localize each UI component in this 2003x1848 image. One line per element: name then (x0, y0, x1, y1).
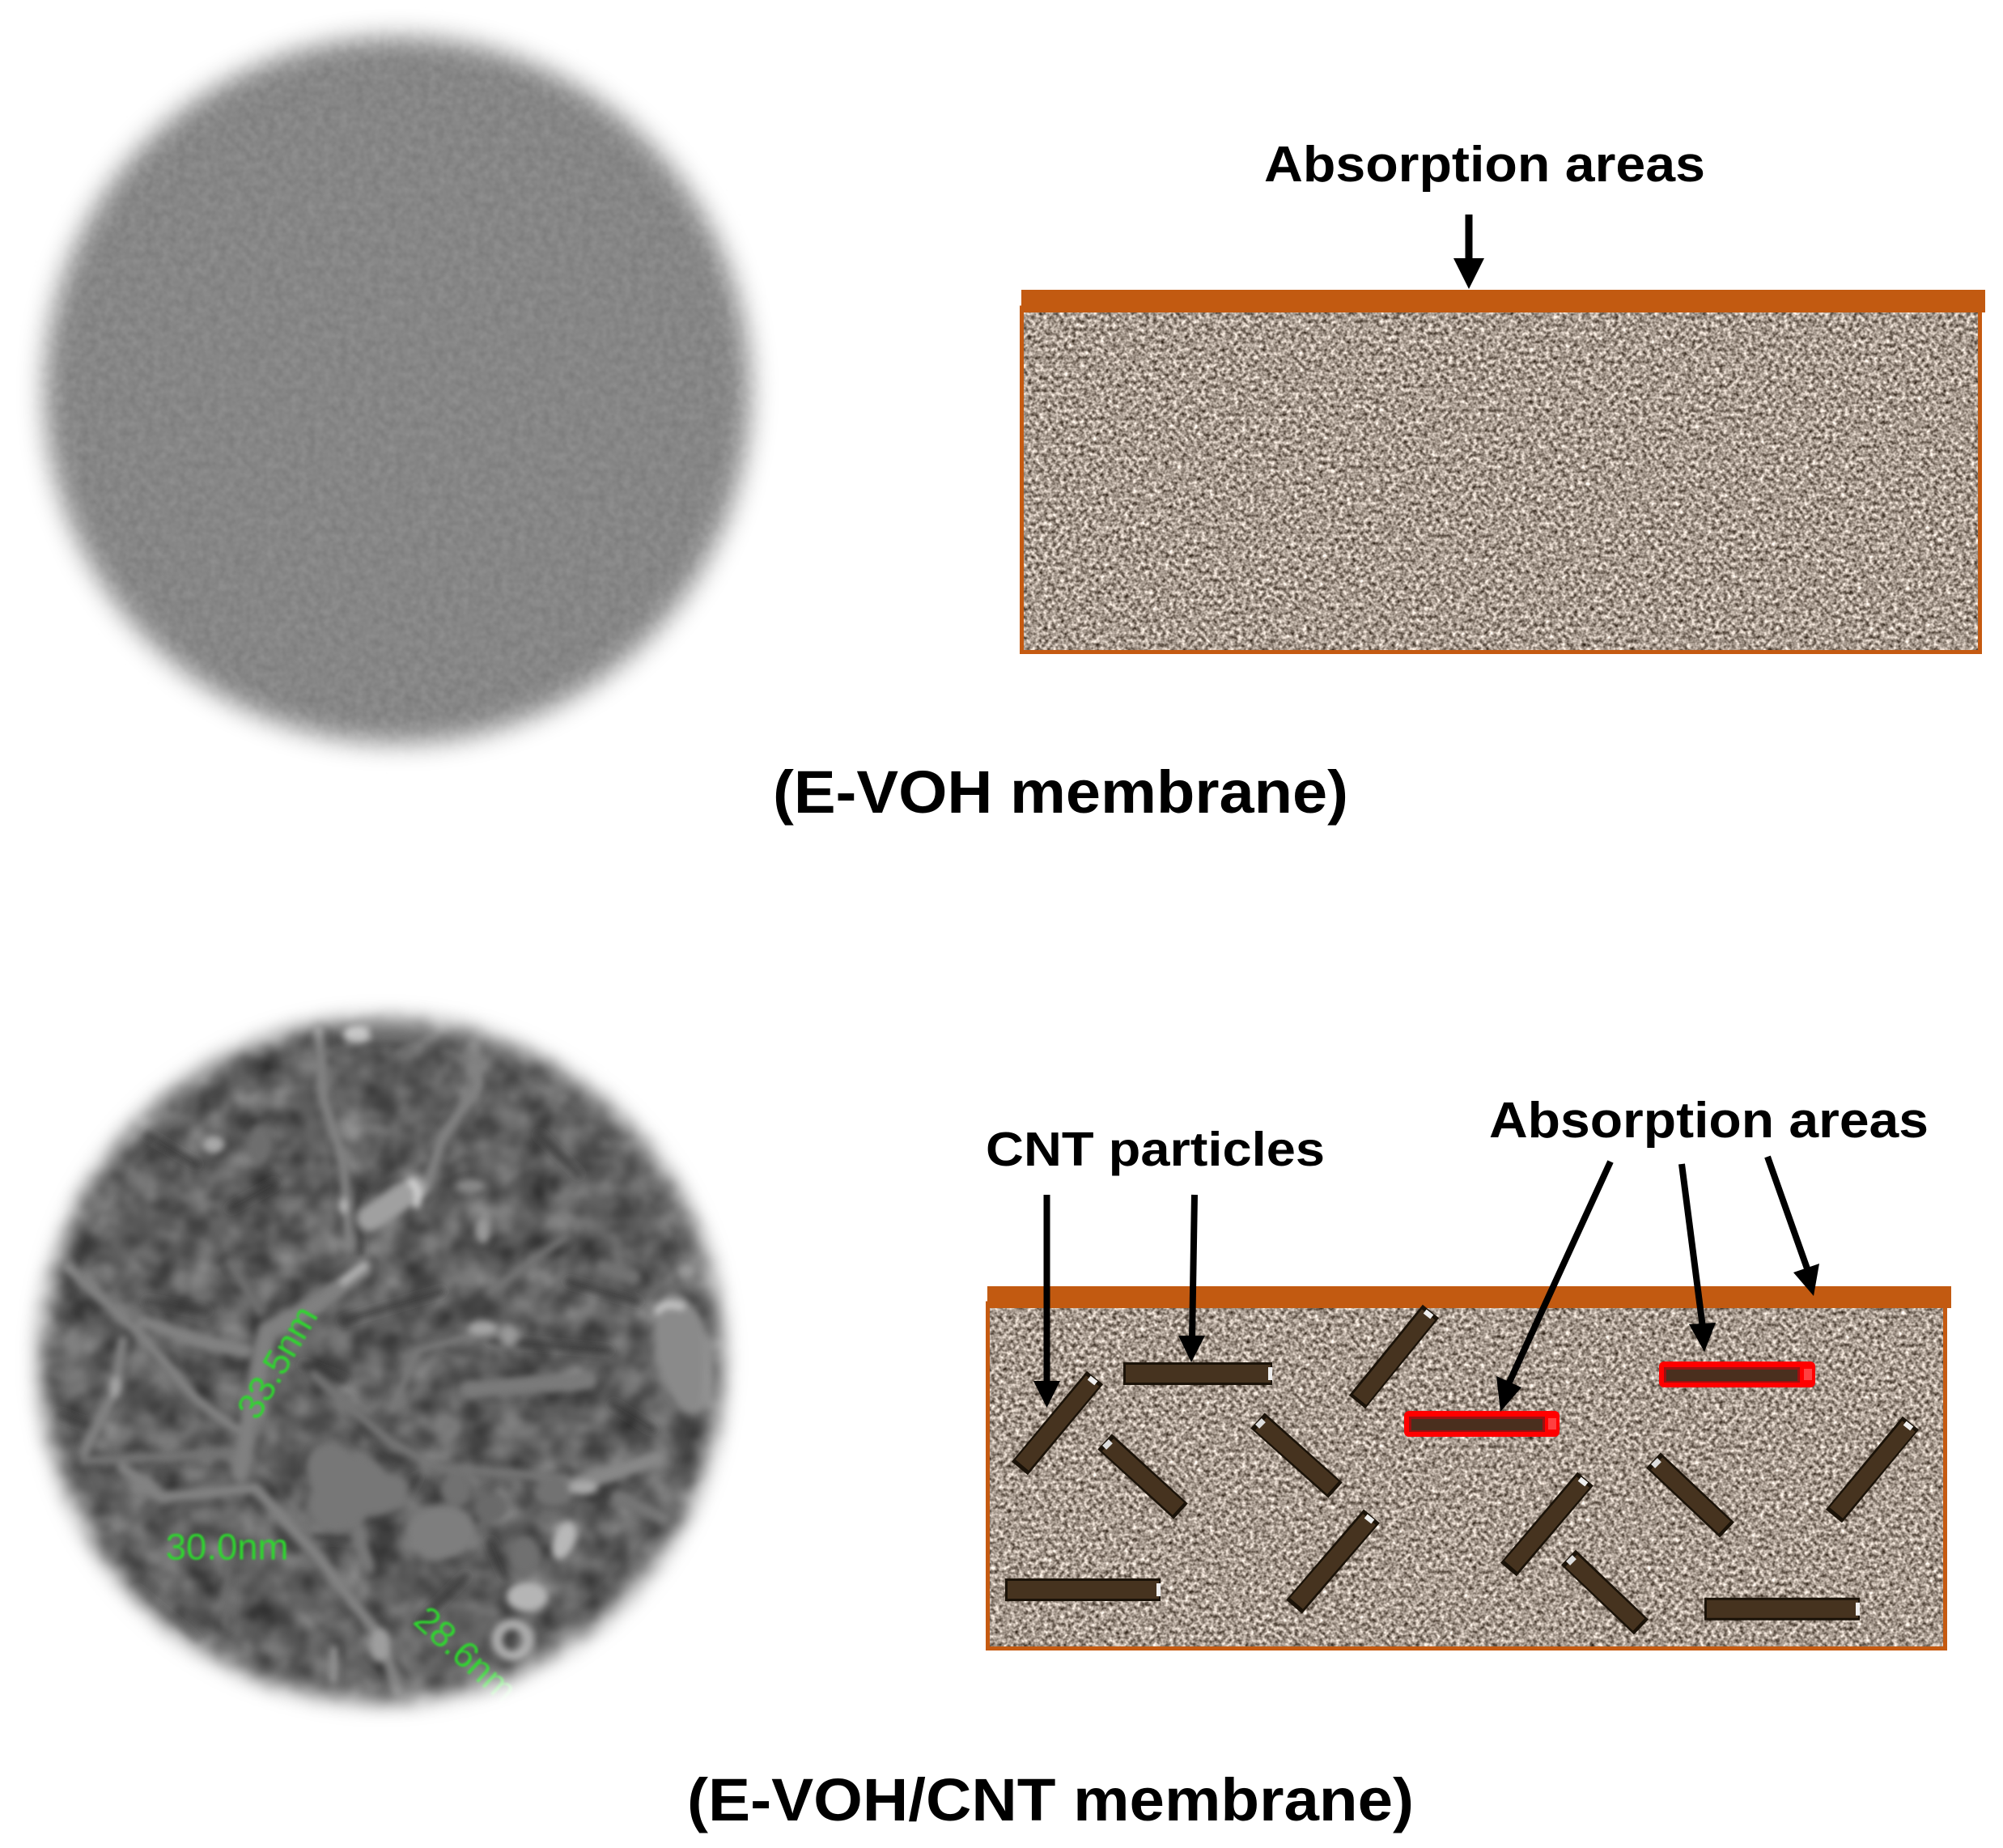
arrow: CNT particles to left rod (1033, 1195, 1060, 1408)
arrow: absorption area to surface layer (1767, 1157, 1819, 1296)
membrane body texture (989, 1308, 1944, 1647)
diagram: E-VOH/CNT membrane cross-section (987, 1286, 1951, 1648)
label: CNT particles: CNT particles (986, 1123, 1325, 1176)
measurement: 30.0nm: 30.0nm (166, 1526, 288, 1567)
SEM image: E-VOH/CNT surface with measurements (24, 1003, 739, 1718)
measurement: 28.6nm: 28.6nm (406, 1598, 525, 1710)
caption: E-VOH membrane: (E-VOH membrane) (773, 758, 1348, 826)
panel: E-VOH/CNT membrane (0, 988, 1951, 1833)
arrow: to absorption surface (1453, 215, 1484, 289)
CNT rod (1294, 1516, 1372, 1607)
membrane body texture (1023, 312, 1979, 651)
CNT rod (1704, 1598, 1860, 1621)
arrow: absorption area to lower red rod (1496, 1162, 1610, 1412)
absorption surface layer (987, 1286, 1951, 1308)
CNT rod (1258, 1421, 1335, 1490)
CNT rod (1123, 1362, 1272, 1385)
CNT rod (1509, 1479, 1585, 1570)
panel: E-VOH membrane (45, 37, 1985, 826)
CNT rod (1105, 1442, 1181, 1511)
label: absorption areas: Absorption areas (1489, 1093, 1929, 1149)
highlighted CNT absorption area, lower (1404, 1411, 1560, 1437)
CNT rod (1834, 1423, 1911, 1516)
highlighted CNT absorption area, upper (1659, 1362, 1815, 1387)
SEM background grain (24, 1003, 739, 1718)
diagram: E-VOH membrane cross-section (1021, 290, 1985, 652)
CNT rod (1653, 1460, 1727, 1530)
SEM fibres and particles (59, 1020, 722, 1689)
CNT particles (1005, 1311, 1911, 1627)
CNT rod (1357, 1311, 1431, 1402)
arrow: absorption area to upper red rod (1682, 1164, 1716, 1352)
arrow: CNT particles to horizontal rod (1178, 1195, 1205, 1362)
membrane outline (987, 1303, 1946, 1648)
CNT rod (1005, 1578, 1161, 1601)
absorption surface layer (1021, 290, 1985, 312)
membrane outline (1021, 308, 1980, 652)
measurement: 33.5nm: 33.5nm (229, 1298, 326, 1425)
CNT rod (1568, 1557, 1641, 1627)
caption: E-VOH/CNT membrane: (E-VOH/CNT membrane) (687, 1766, 1414, 1833)
measurement labels (166, 1298, 525, 1710)
CNT rod (1020, 1378, 1095, 1468)
label: absorption areas: Absorption areas (1264, 137, 1705, 193)
SEM image: E-VOH surface (45, 37, 750, 743)
